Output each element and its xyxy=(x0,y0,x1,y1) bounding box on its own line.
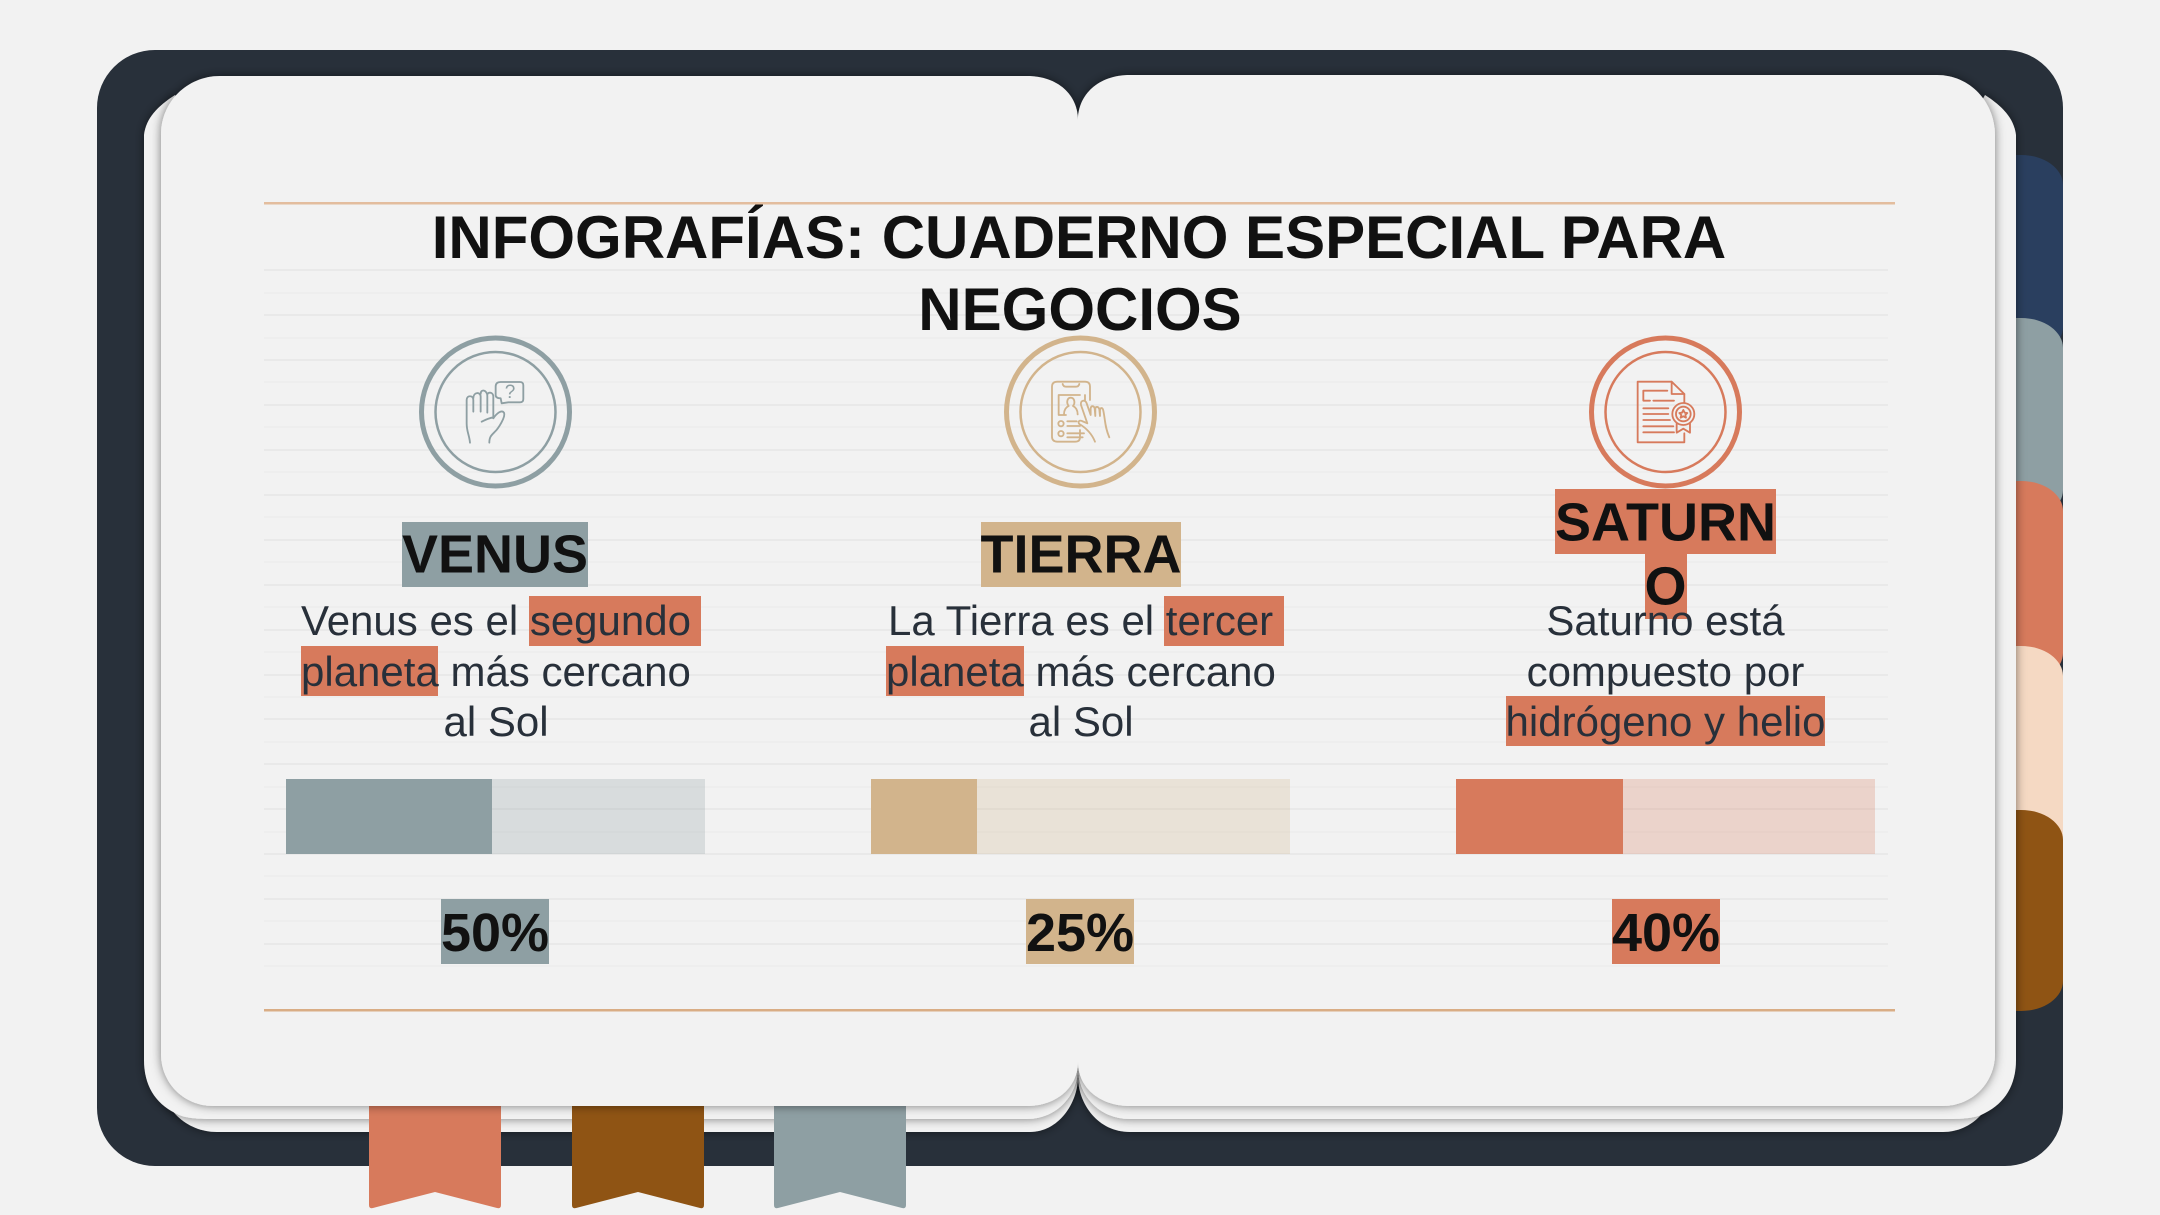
description: Tierra xyxy=(886,596,1284,745)
value: 50%: 50% xyxy=(441,903,549,963)
heading: Saturno xyxy=(1555,489,1776,619)
heading: Saturno: O xyxy=(1644,556,1687,616)
side index tabs xyxy=(1960,155,2063,1011)
description: Tierra: planeta más cercano xyxy=(886,648,1276,695)
value: 25%: 25% xyxy=(1026,903,1134,963)
progress bar: Tierra 25% xyxy=(871,779,1290,854)
ruled paper lines xyxy=(264,270,1888,966)
heading: Tierra: TIERRA xyxy=(980,524,1182,584)
description: Tierra: La Tierra es el tercer xyxy=(888,597,1273,644)
title: NEGOCIOS xyxy=(918,276,1242,343)
top rule xyxy=(264,202,1895,204)
value: 40%: 40% xyxy=(1612,903,1720,963)
back page stack xyxy=(161,300,1995,1132)
bookmark ribbons xyxy=(369,1090,906,1208)
middle page stack xyxy=(144,95,2016,1119)
icon: raised hand with question bubble: ? xyxy=(505,382,515,403)
column: Tierra xyxy=(871,338,1290,964)
column: Saturno xyxy=(1456,338,1875,964)
description: Tierra: al Sol xyxy=(1028,698,1134,745)
description: Saturno: Saturno está xyxy=(1546,597,1785,644)
description: Venus: al Sol xyxy=(443,698,549,745)
column: Venus xyxy=(286,338,705,964)
description: Venus xyxy=(301,596,701,745)
icon: phone profile with pointing hand xyxy=(1006,338,1154,486)
heading: Saturno: SATURN xyxy=(1555,492,1776,552)
progress bar: Saturno 40% xyxy=(1456,779,1875,854)
bottom rule xyxy=(264,1009,1895,1012)
description: Venus: Venus es el segundo xyxy=(301,597,691,644)
description: Venus: planeta más cercano xyxy=(301,648,691,695)
description: Saturno: compuesto por xyxy=(1527,648,1804,695)
icon: raised hand with question bubble xyxy=(422,338,570,486)
progress bar: Venus 50% xyxy=(286,779,705,854)
heading: Venus: VENUS xyxy=(402,524,588,584)
description: Saturno xyxy=(1506,597,1825,746)
title: INFOGRAFÍAS: CUADERNO ESPECIAL PARA xyxy=(432,204,1726,271)
icon: certificate document xyxy=(1592,338,1740,486)
description: Saturno: hidrógeno y helio xyxy=(1506,698,1825,745)
top notebook page xyxy=(161,75,1995,1106)
